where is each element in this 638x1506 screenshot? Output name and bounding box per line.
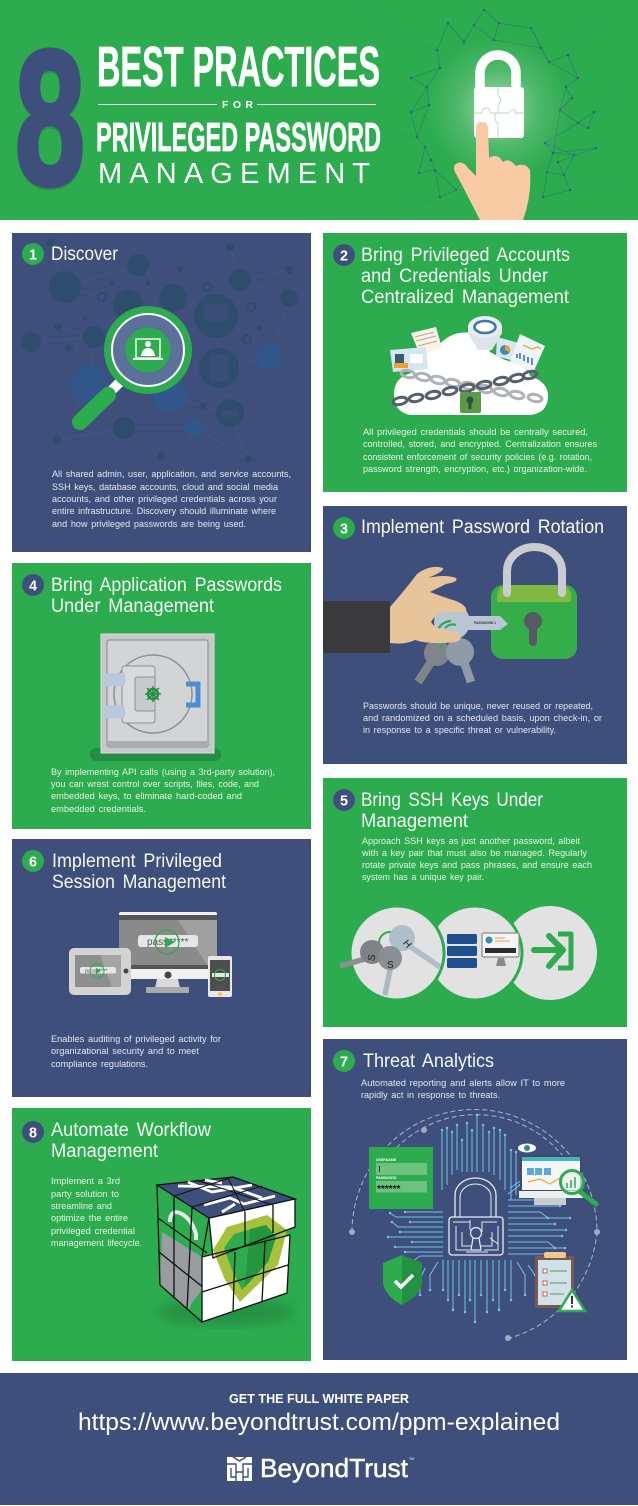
number badge 8: 8 [29, 1124, 37, 1142]
lock glow [426, 36, 570, 180]
icon: desktop monitor: pass [147, 937, 168, 948]
title: best practices: BEST PRACTICES [97, 35, 380, 99]
circle: ssh keys [340, 906, 444, 1000]
circuit board traces [388, 1115, 570, 1322]
heading: Session Management [52, 872, 227, 893]
body text: Approach SSH keys as just another password, albeit [362, 836, 580, 847]
title: privileged password: PRIVILEGED PASSWORD [96, 114, 381, 160]
login form [369, 1147, 433, 1209]
number badge 1: 1 [29, 246, 37, 264]
number badge 7: 7 [340, 1054, 348, 1070]
url: https://www.beyondtrust.com/ppm-explained [78, 1409, 560, 1436]
body text [363, 427, 597, 475]
body text: rapidly act in response to threats. [361, 1090, 500, 1101]
circle: ssh keys: S [366, 953, 378, 962]
body text [51, 1176, 142, 1249]
icon: puzzle padlock [474, 55, 524, 138]
body text [52, 469, 291, 530]
sleeve [323, 601, 390, 653]
number badge 4: 4 [29, 578, 38, 594]
heading: Implement Password Rotation [361, 517, 604, 538]
heading: Bring Application Passwords [51, 575, 282, 596]
panel 6: session management [12, 839, 311, 1097]
body text: in response to a specific threat or vulnerability. [363, 725, 556, 736]
body text: All privileged credentials should be centrally secured, [363, 427, 588, 438]
icon: circuit padlock [447, 1178, 504, 1257]
body text: All shared admin, user, application, and service accounts, [52, 469, 291, 480]
body text: you can wrest control over scripts, files, code, and [51, 779, 259, 790]
body text: privileged credential [51, 1226, 135, 1237]
body text [361, 836, 592, 883]
hand [390, 567, 466, 644]
keys: PASSWORD 1 [474, 621, 496, 625]
dashed orbit with nodes [349, 1110, 600, 1341]
panel 2: centralized management [323, 233, 627, 492]
body text: Automated reporting and alerts allow IT to more [361, 1078, 565, 1089]
body text: and how privileged passwords are being used. [52, 519, 246, 530]
background network icons [21, 239, 298, 463]
body text: entire infrastructure. Discovery should illuminate where [52, 506, 276, 517]
body text: streamline and [51, 1201, 112, 1212]
number badge 8 [22, 1121, 44, 1143]
icon: tablet [69, 948, 131, 995]
heading: Centralized Management [361, 287, 570, 308]
circle: arrow [503, 906, 597, 1000]
big numeral 8 [15, 10, 85, 227]
circle: ssh keys: H [400, 938, 413, 951]
icon: clipboard with warning [535, 1252, 585, 1311]
number badge 1 [22, 243, 44, 265]
heading: Bring SSH Keys Under [361, 790, 544, 811]
heading: Automate Workflow [51, 1120, 211, 1141]
icon: desktop monitor: ***** [169, 937, 189, 948]
panel 3: password rotation [323, 506, 627, 764]
body text: accounts, and other privileged credentials across your [52, 494, 278, 505]
panel 1: discover [12, 233, 311, 552]
body text: rotate private keys and pass phrases, and ensure each [362, 860, 592, 871]
number badge 3 [333, 517, 355, 539]
body text: controlled, stored, and encrypted. Centralization ensures [363, 439, 597, 450]
icon: vault [90, 634, 221, 761]
number badge 7 [333, 1050, 355, 1072]
title: for with rules: FOR [222, 99, 253, 111]
network nodes [410, 9, 597, 198]
number badge 3: 3 [340, 520, 348, 538]
heading: Management [361, 811, 469, 832]
heading [51, 575, 282, 617]
heading: Threat Analytics [363, 1051, 494, 1072]
icon: monitor with magnifier [518, 1144, 596, 1205]
body text: consistent enforcement of security policies (e.g. rotation, [363, 452, 592, 463]
number badge 2: 2 [340, 248, 348, 264]
login form: PASSWORD [376, 1176, 397, 1180]
heading: Discover [51, 244, 119, 265]
body text: embedded keys, to eliminate hard-coded and [51, 791, 242, 802]
body text: optimize the entire [51, 1213, 128, 1224]
icon: phone [208, 956, 232, 997]
icon: green padlock [491, 547, 577, 659]
number badge 5 [333, 789, 355, 811]
body text: embedded credentials. [51, 804, 146, 815]
number badge 2 [333, 244, 355, 266]
icon: shield with check [383, 1255, 422, 1305]
body text: system has a unique key pair. [362, 872, 484, 883]
panel 4: application passwords [12, 563, 311, 829]
circle: ssh keys: S [387, 960, 394, 971]
body text [51, 767, 275, 815]
big numeral 8: 8 [15, 10, 85, 225]
body text [361, 1078, 565, 1101]
body text: SSH keys, database accounts, cloud and social media [52, 482, 279, 493]
icon: pointing hand [454, 122, 530, 220]
body text: compliance regulations. [51, 1059, 148, 1070]
illustration: locked cloud [390, 316, 548, 415]
body text: Enables auditing of privileged activity for [51, 1034, 222, 1045]
number badge 5: 5 [340, 792, 348, 810]
logo: TM [409, 1457, 414, 1461]
icon: desktop monitor [119, 912, 217, 993]
body text: organizational security and to meet [51, 1046, 199, 1057]
body text: with a key pair that must also be managed. Regularly [361, 848, 587, 859]
keys [418, 604, 508, 682]
body text: party solution to [51, 1189, 119, 1200]
login form: ****** [377, 1184, 400, 1195]
login form: USERNAME [376, 1158, 397, 1162]
panel 5: ssh keys [323, 778, 627, 1027]
circle: server and monitor [428, 906, 522, 1000]
body text: Implement a 3rd [51, 1176, 120, 1187]
logo: BeyondTrust [260, 1453, 409, 1483]
body text: and randomized on a scheduled basis, upon check-in, or [363, 713, 603, 724]
heading: Implement Privileged [52, 851, 222, 872]
panel 7: threat analytics [323, 1039, 627, 1360]
icon: tablet: pass***** [85, 968, 108, 974]
heading [361, 790, 544, 832]
body text: By implementing API calls (using a 3rd-party solution), [51, 767, 275, 778]
body text [363, 701, 603, 736]
footer banner [0, 1373, 638, 1505]
body text: Passwords should be unique, never reused or repeated, [363, 701, 593, 712]
header banner [0, 0, 638, 227]
title: management: MANAGEMENT [98, 158, 370, 190]
body text [51, 1034, 222, 1070]
heading: Under Management [51, 596, 215, 617]
body text: management lifecycle. [51, 1238, 142, 1249]
heading [52, 851, 227, 893]
body text: password strength, encryption, etc.) organization-wide. [363, 464, 587, 475]
icon: security rubik cube [157, 1177, 295, 1326]
number badge 4 [22, 574, 44, 596]
heading: Management [51, 1141, 159, 1162]
number badge 6 [22, 850, 44, 872]
heading [361, 245, 570, 308]
heading: Bring Privileged Accounts [361, 245, 570, 266]
number badge 6: 6 [29, 854, 37, 870]
heading [51, 1120, 211, 1162]
panel 8: automate workflow [12, 1108, 311, 1361]
big numeral 8: 8 [15, 12, 85, 227]
icon: magnifying glass [80, 306, 192, 422]
call to action: GET THE FULL WHITE PAPER [229, 1392, 409, 1406]
network graphic [360, 10, 620, 210]
heading: and Credentials Under [361, 266, 549, 287]
